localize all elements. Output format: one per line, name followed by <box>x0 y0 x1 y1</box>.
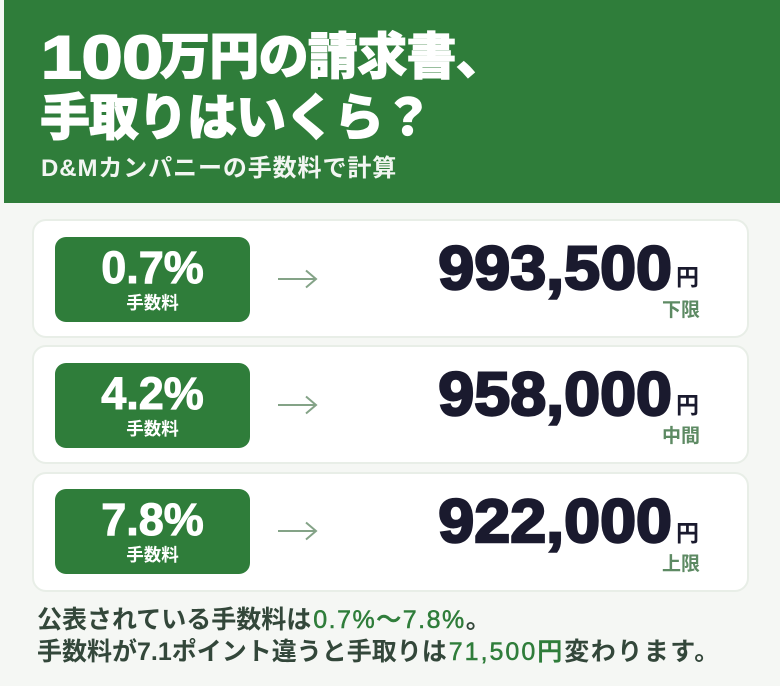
card 1 background <box>32 219 749 338</box>
arrow 3 <box>278 522 318 540</box>
fee badge 0.7% <box>55 237 250 322</box>
footnote line 1: 公表されている手数料は0.7%〜7.8%。 <box>37 606 491 634</box>
rate caption: 手数料 <box>126 545 179 565</box>
arrow 1 <box>278 270 318 288</box>
fee badge 7.8% <box>55 489 250 574</box>
header band <box>4 0 780 203</box>
tier label middle: 中間 <box>662 426 700 447</box>
rate: 0.7% <box>101 242 204 293</box>
yen unit 2: 円 <box>676 392 699 418</box>
amount 958,000: 958,000 <box>438 360 672 428</box>
rate caption: 手数料 <box>126 419 179 439</box>
fee badge 4.2% <box>55 363 250 448</box>
title line 1 number: 100 <box>41 24 163 91</box>
yen unit 1: 円 <box>676 264 699 290</box>
yen unit 3: 円 <box>676 520 699 546</box>
tier label upper: 上限 <box>662 554 700 575</box>
tier label lower: 下限 <box>662 300 700 321</box>
subtitle: D&Mカンパニーの手数料で計算 <box>41 155 397 182</box>
rate caption: 手数料 <box>126 293 179 313</box>
amount 922,000: 922,000 <box>438 487 672 555</box>
amount 993,500: 993,500 <box>438 234 672 302</box>
rate: 4.2% <box>101 368 204 419</box>
arrow 2 <box>278 396 318 414</box>
title line 2: 手取りはいくら？ <box>40 90 432 146</box>
title line 1 text: 万円の請求書、 <box>160 29 505 85</box>
card 3 background <box>32 472 749 592</box>
rate: 7.8% <box>101 494 204 545</box>
card 2 background <box>32 345 749 464</box>
footnote line 2: 手数料が7.1ポイント違うと手取りは71,500円変わります。 <box>37 638 721 666</box>
